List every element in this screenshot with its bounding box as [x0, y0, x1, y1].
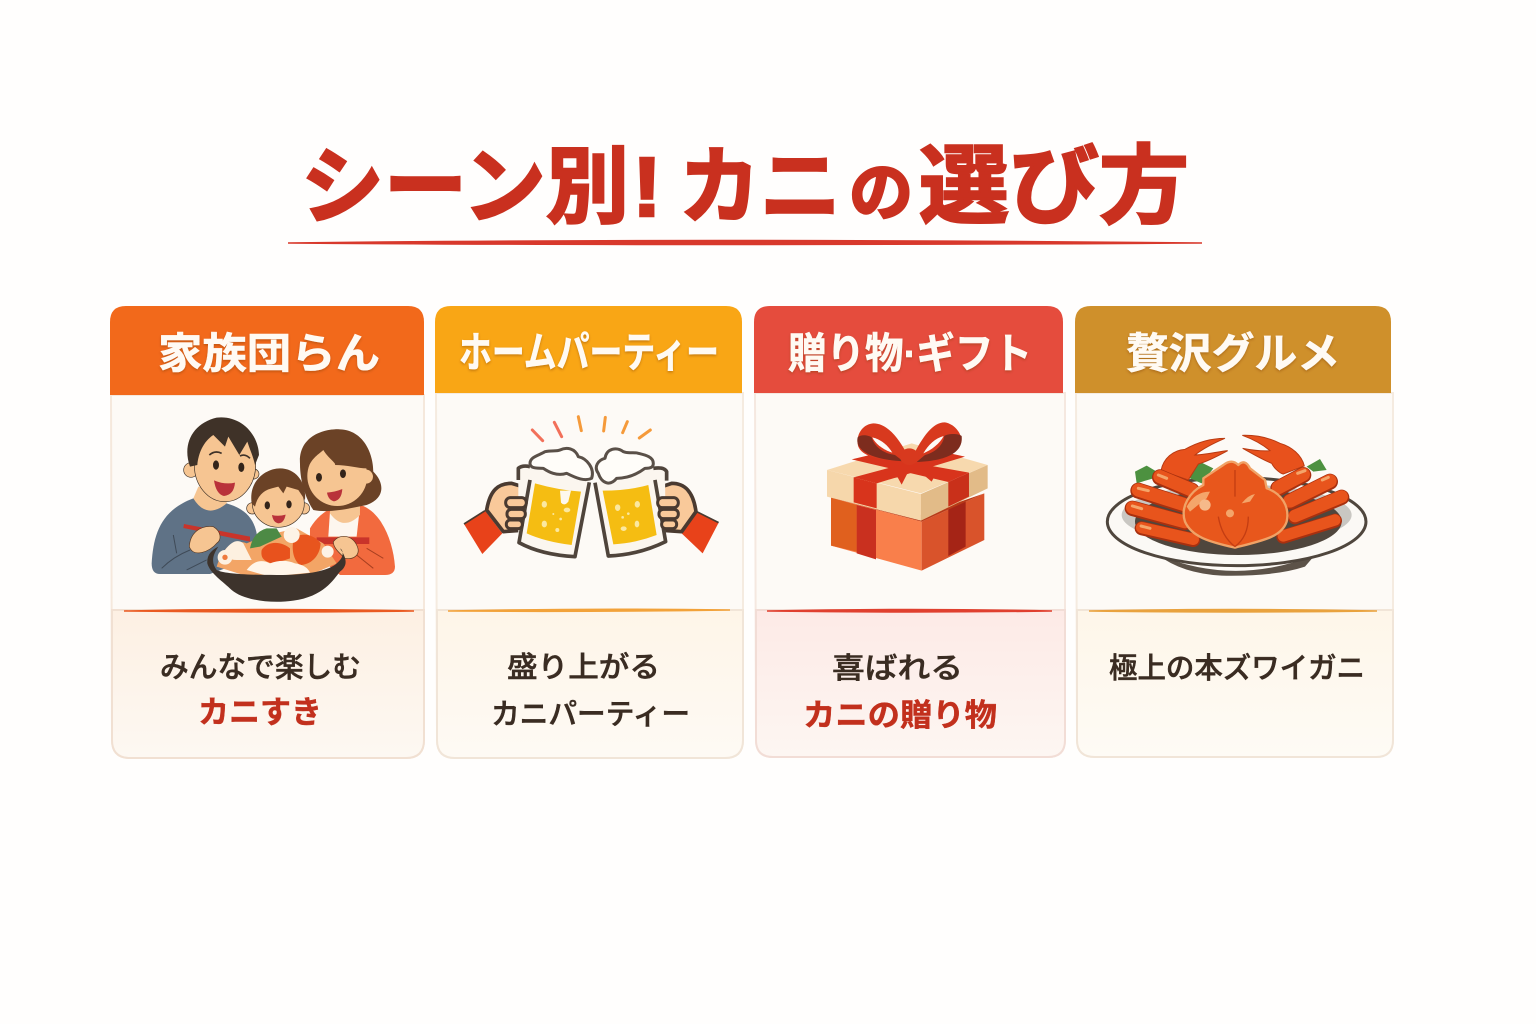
- gourmet caption: 極上の本ズワイガニ: [1109, 652, 1365, 685]
- panel: gift: [754, 306, 1065, 757]
- home party header: ホームパーティー: [459, 329, 719, 376]
- divider: [767, 610, 1052, 612]
- family header: [110, 306, 424, 395]
- title: [301, 139, 1189, 235]
- divider: [1089, 610, 1377, 612]
- gourmet header: [1075, 306, 1391, 393]
- panel: home party: [435, 306, 743, 758]
- home party caption: カニパーティー: [491, 699, 690, 731]
- title: 選び方: [919, 139, 1189, 235]
- title underline: [288, 240, 1202, 244]
- family caption: カニすき: [198, 695, 322, 730]
- gourmet header: 贅沢グルメ: [1126, 330, 1340, 377]
- panel: gourmet: [1075, 306, 1393, 757]
- home party caption: 盛り上がる: [507, 651, 660, 684]
- divider: [448, 609, 730, 611]
- family caption: みんなで楽しむ: [160, 651, 361, 684]
- icon: crab on plate: [1107, 435, 1366, 576]
- gift header: [754, 306, 1063, 393]
- title: !: [632, 140, 662, 234]
- gift caption: カニの贈り物: [803, 698, 997, 733]
- icon: gift box: [827, 422, 988, 571]
- divider: [124, 610, 414, 612]
- title: シーン別: [301, 140, 629, 234]
- home party header: [435, 306, 742, 393]
- gift header: 贈り物·ギフト: [788, 330, 1032, 377]
- family header: 家族団らん: [158, 330, 380, 377]
- home party caption: [491, 651, 690, 731]
- gift caption: [803, 652, 997, 733]
- family caption: [160, 651, 361, 730]
- panel: family: [110, 306, 424, 758]
- gift caption: 喜ばれる: [832, 652, 963, 685]
- icon: family around hot pot: [152, 417, 395, 602]
- title: の: [849, 157, 913, 229]
- title: カニ: [679, 140, 841, 234]
- icon: beer mugs toast: [464, 417, 719, 557]
